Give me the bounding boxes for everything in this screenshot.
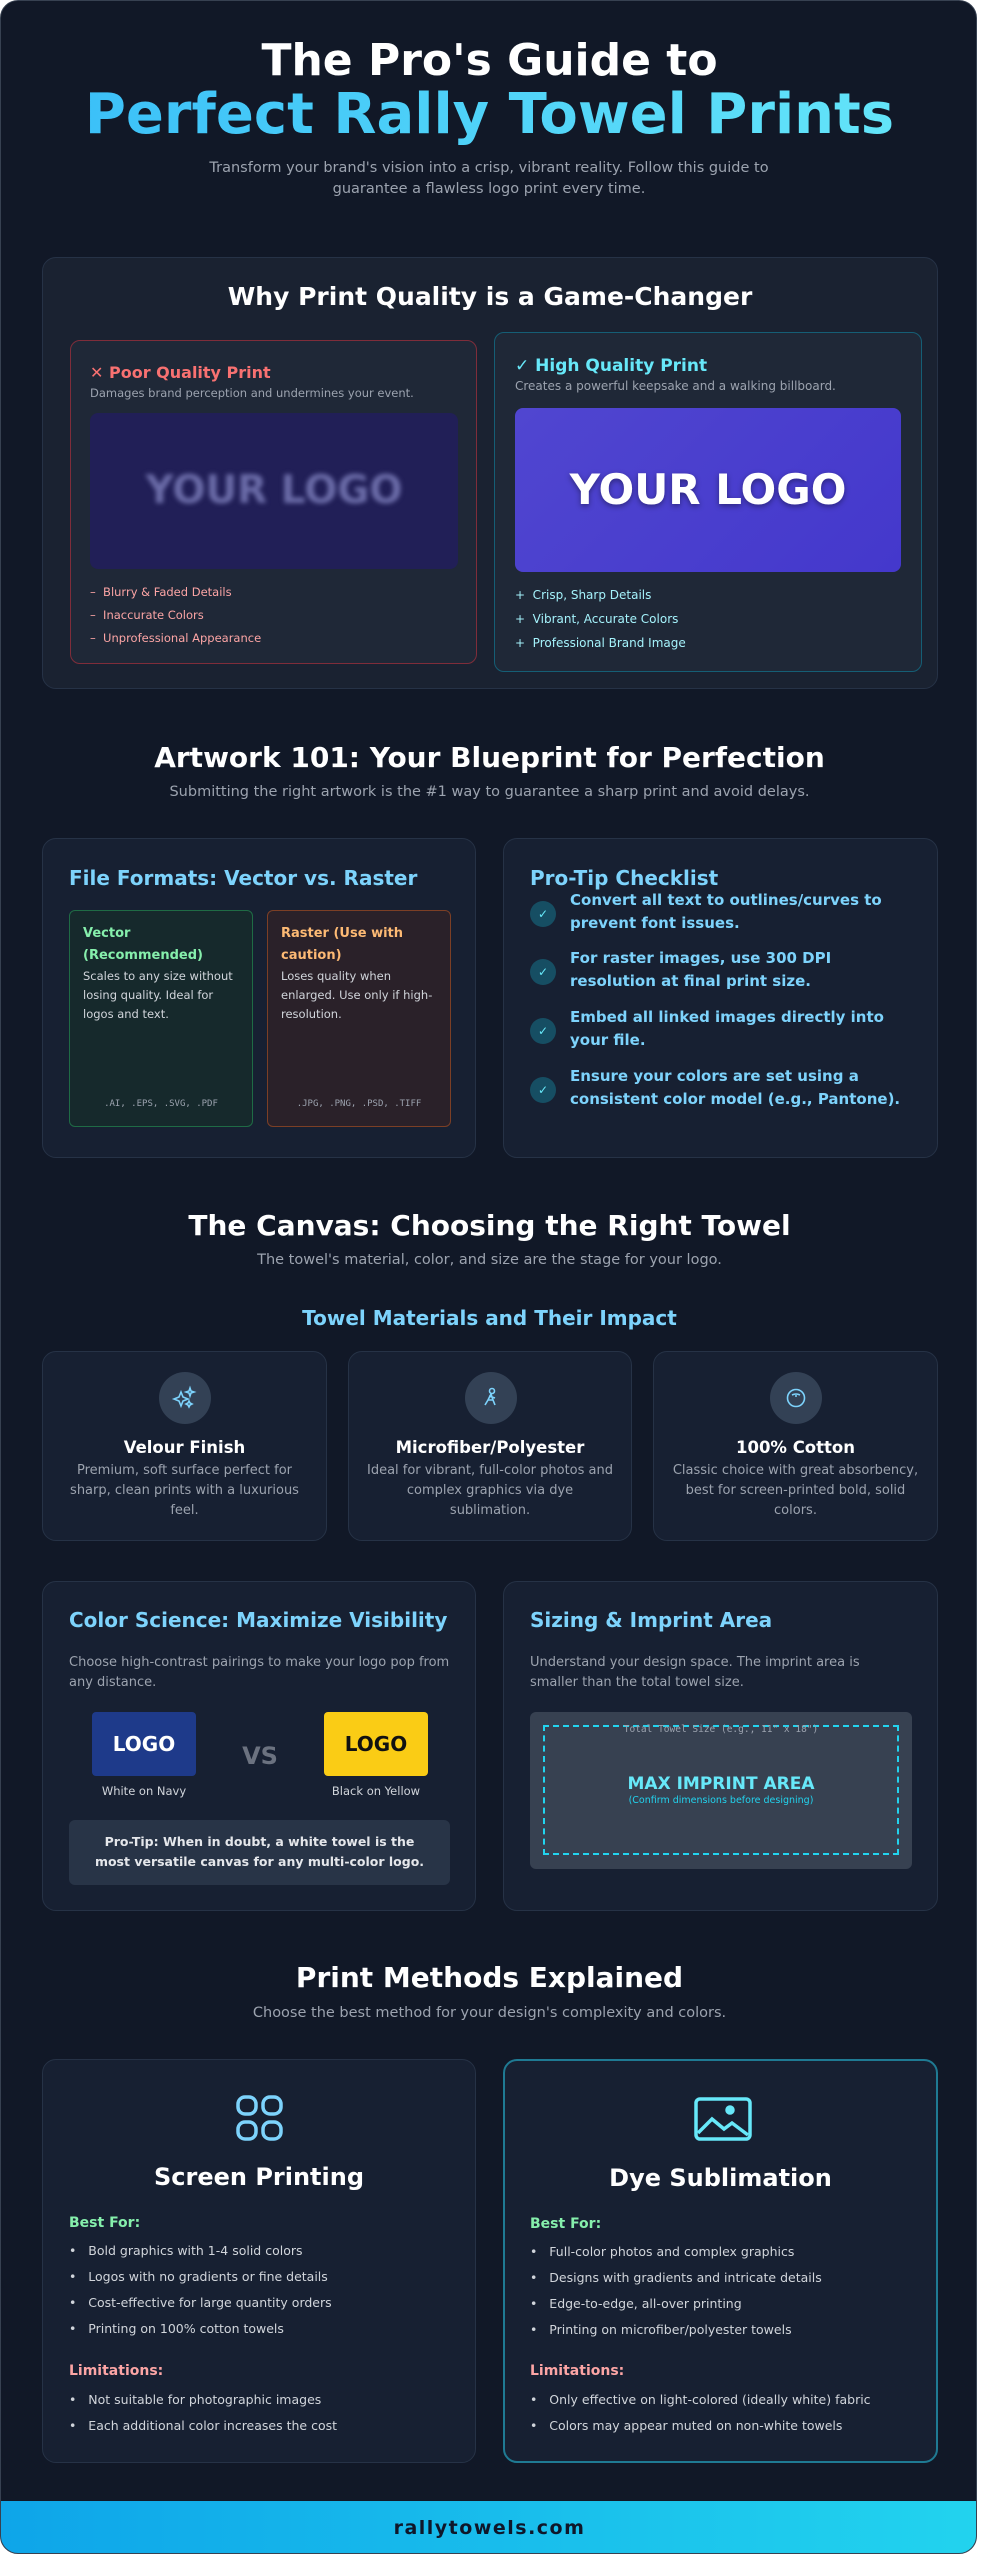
limitations: Limitations: xyxy=(69,2363,163,2379)
checklist title: Pro-Tip Checklist xyxy=(530,866,718,890)
pro-tip callout: Pro-Tip: When in doubt, a white towel is the xyxy=(105,1834,414,1849)
card: velour xyxy=(42,1351,327,1541)
title line 1: The Pro's Guide to xyxy=(261,35,718,86)
poor bullets: – Unprofessional Appearance xyxy=(90,631,261,645)
best for: Best For: xyxy=(530,2216,601,2232)
blurry logo: YOUR LOGO xyxy=(145,468,403,513)
vector box xyxy=(69,910,253,1127)
logo: black on yellow xyxy=(324,1712,428,1798)
checklist items: ✓ xyxy=(538,965,548,979)
subtitle: Transform your brand's vision into a crisp, vibrant reality. Follow this guide to guarantee a flawless logo print every time. xyxy=(209,160,769,197)
color description: Choose high-contrast pairings to make your logo pop from any distance. xyxy=(69,1655,449,1690)
icon: grid xyxy=(236,2095,283,2141)
heading: towel materials: Towel Materials and Their Impact xyxy=(302,1306,677,1330)
heading: artwork 101: Artwork 101: Your Blueprint for Perfection xyxy=(154,741,825,774)
panel: screen printing: • Bold graphics with 1-4 solid colors xyxy=(69,2243,303,2258)
checklist items: For raster images, use 300 DPI resolution at final print size. xyxy=(570,949,831,990)
logo: black on yellow: LOGO xyxy=(345,1732,407,1756)
high quality box xyxy=(494,332,922,672)
poor quality box: Damages brand perception and undermines your event. xyxy=(90,386,414,400)
file formats title: File Formats: Vector vs. Raster xyxy=(69,866,417,890)
pro-tip callout xyxy=(69,1820,450,1885)
panel: color science xyxy=(42,1581,476,1911)
limitations: Limitations: xyxy=(530,2363,624,2379)
card: cotton: Classic choice with great absorbency, best for screen-printed bold, solid colors. xyxy=(673,1463,918,1518)
logo: black on yellow: Black on Yellow xyxy=(332,1784,420,1798)
checklist items: Ensure your colors are set using a consistent color model (e.g., Pantone). xyxy=(570,1067,900,1108)
card: microfiber xyxy=(348,1351,632,1541)
poor title: ✕ Poor Quality Print xyxy=(90,363,271,382)
screen printing title: Screen Printing xyxy=(154,2163,364,2191)
panel: file formats xyxy=(42,838,476,1158)
high bullets xyxy=(515,588,686,650)
icon: sparkles xyxy=(159,1372,211,1424)
panel: dye sublimation xyxy=(503,2059,938,2463)
footer xyxy=(1,2501,978,2555)
panel: dye sublimation: • Edge-to-edge, all-over printing xyxy=(530,2296,742,2311)
card: cotton xyxy=(653,1351,938,1541)
footer: rallytowels.com xyxy=(394,2517,585,2539)
pro-tip callout: most versatile canvas for any multi-color logo. xyxy=(95,1854,424,1869)
panel: pro-tip checklist xyxy=(503,838,938,1158)
dye sublimation title: Dye Sublimation xyxy=(609,2164,832,2192)
card: cotton: 100% Cotton xyxy=(736,1438,855,1457)
card: velour: Velour Finish xyxy=(124,1438,245,1457)
panel: sizing xyxy=(503,1581,938,1911)
raster box: .JPG, .PNG, .PSD, .TIFF xyxy=(297,1099,421,1109)
checklist items: ✓ xyxy=(538,1024,548,1038)
subheading print methods: Choose the best method for your design's complexity and colors. xyxy=(253,2005,726,2021)
panel: dye sublimation: • Full-color photos and complex graphics xyxy=(530,2244,794,2259)
panel: dye sublimation: • Printing on microfiber/polyester towels xyxy=(530,2322,792,2337)
card: microfiber: Ideal for vibrant, full-color photos and complex graphics via dye sublimation. xyxy=(367,1463,613,1518)
panel: dye sublimation: • Designs with gradients and intricate details xyxy=(530,2270,822,2285)
panel: screen printing xyxy=(42,2059,476,2463)
crisp logo: YOUR LOGO xyxy=(570,465,846,514)
icon: cotton xyxy=(770,1372,822,1424)
high bullets: + Crisp, Sharp Details xyxy=(515,588,651,602)
vector box: .AI, .EPS, .SVG, .PDF xyxy=(104,1099,218,1109)
panel: screen printing: • Cost-effective for large quantity orders xyxy=(69,2295,332,2310)
raster box: Loses quality when enlarged. Use only if high-resolution. xyxy=(281,969,432,1021)
checklist items: Convert all text to outlines/curves to prevent font issues. xyxy=(570,891,882,932)
best for: Best For: xyxy=(69,2215,140,2231)
checklist items: Embed all linked images directly into your file. xyxy=(570,1008,884,1049)
checklist items: ✓ xyxy=(538,1083,548,1097)
panel: why print quality xyxy=(42,257,938,689)
high quality box: Creates a powerful keepsake and a walking billboard. xyxy=(515,379,836,393)
poor bullets: – Blurry & Faded Details xyxy=(90,585,232,599)
panel: screen printing: • Not suitable for photographic images xyxy=(69,2392,321,2407)
raster box: Raster (Use with caution) xyxy=(281,926,403,963)
card: velour: Premium, soft surface perfect for sharp, clean prints with a luxurious feel. xyxy=(70,1463,299,1518)
panel: screen printing: • Printing on 100% cotton towels xyxy=(69,2321,284,2336)
raster box xyxy=(267,910,451,1127)
logo: white on navy xyxy=(92,1712,196,1798)
card: microfiber: Microfiber/Polyester xyxy=(396,1438,584,1457)
imprint diagram: MAX IMPRINT AREA xyxy=(628,1774,814,1794)
crisp logo xyxy=(515,408,901,572)
heading: Why Print Quality is a Game-Changer xyxy=(228,282,752,311)
logo: white on navy: White on Navy xyxy=(102,1784,186,1798)
subheading artwork: Submitting the right artwork is the #1 way to guarantee a sharp print and avoid delays. xyxy=(169,784,810,800)
panel: screen printing: • Each additional color increases the cost xyxy=(69,2418,337,2433)
blurry logo xyxy=(90,413,458,569)
high bullets: + Professional Brand Image xyxy=(515,636,686,650)
subheading canvas: The towel's material, color, and size are the stage for your logo. xyxy=(257,1252,722,1268)
vs: VS xyxy=(242,1742,278,1770)
panel: dye sublimation: • Only effective on light-colored (ideally white) fabric xyxy=(530,2392,871,2407)
sizing description: Understand your design space. The imprint area is smaller than the total towel size. xyxy=(530,1655,860,1690)
color title: Color Science: Maximize Visibility xyxy=(69,1608,447,1632)
sizing title: Sizing & Imprint Area xyxy=(530,1608,772,1632)
imprint diagram xyxy=(530,1712,912,1869)
title line 2: Perfect Rally Towel Prints xyxy=(85,82,894,147)
poor bullets: – Inaccurate Colors xyxy=(90,608,204,622)
high bullets: + Vibrant, Accurate Colors xyxy=(515,612,678,626)
checklist items xyxy=(530,891,900,1108)
checklist items: ✓ xyxy=(538,907,548,921)
heading: print methods: Print Methods Explained xyxy=(296,1961,683,1994)
panel: screen printing: • Logos with no gradients or fine details xyxy=(69,2269,328,2284)
heading: the canvas: The Canvas: Choosing the Right Towel xyxy=(188,1209,791,1242)
high title: ✓ High Quality Print xyxy=(515,356,707,376)
vector box: Scales to any size without losing quality. Ideal for logos and text. xyxy=(83,969,233,1021)
imprint diagram: (Confirm dimensions before designing) xyxy=(629,1795,813,1806)
icon: figure xyxy=(465,1372,517,1424)
logo: white on navy: LOGO xyxy=(113,1732,175,1756)
imprint diagram: Total Towel Size (e.g., 11" x 18") xyxy=(624,1724,818,1735)
poor quality box xyxy=(70,340,477,664)
vector box: Vector (Recommended) xyxy=(83,926,203,963)
icon: image xyxy=(694,2097,752,2141)
panel: dye sublimation: • Colors may appear muted on non-white towels xyxy=(530,2418,842,2433)
poor bullets xyxy=(90,585,261,645)
